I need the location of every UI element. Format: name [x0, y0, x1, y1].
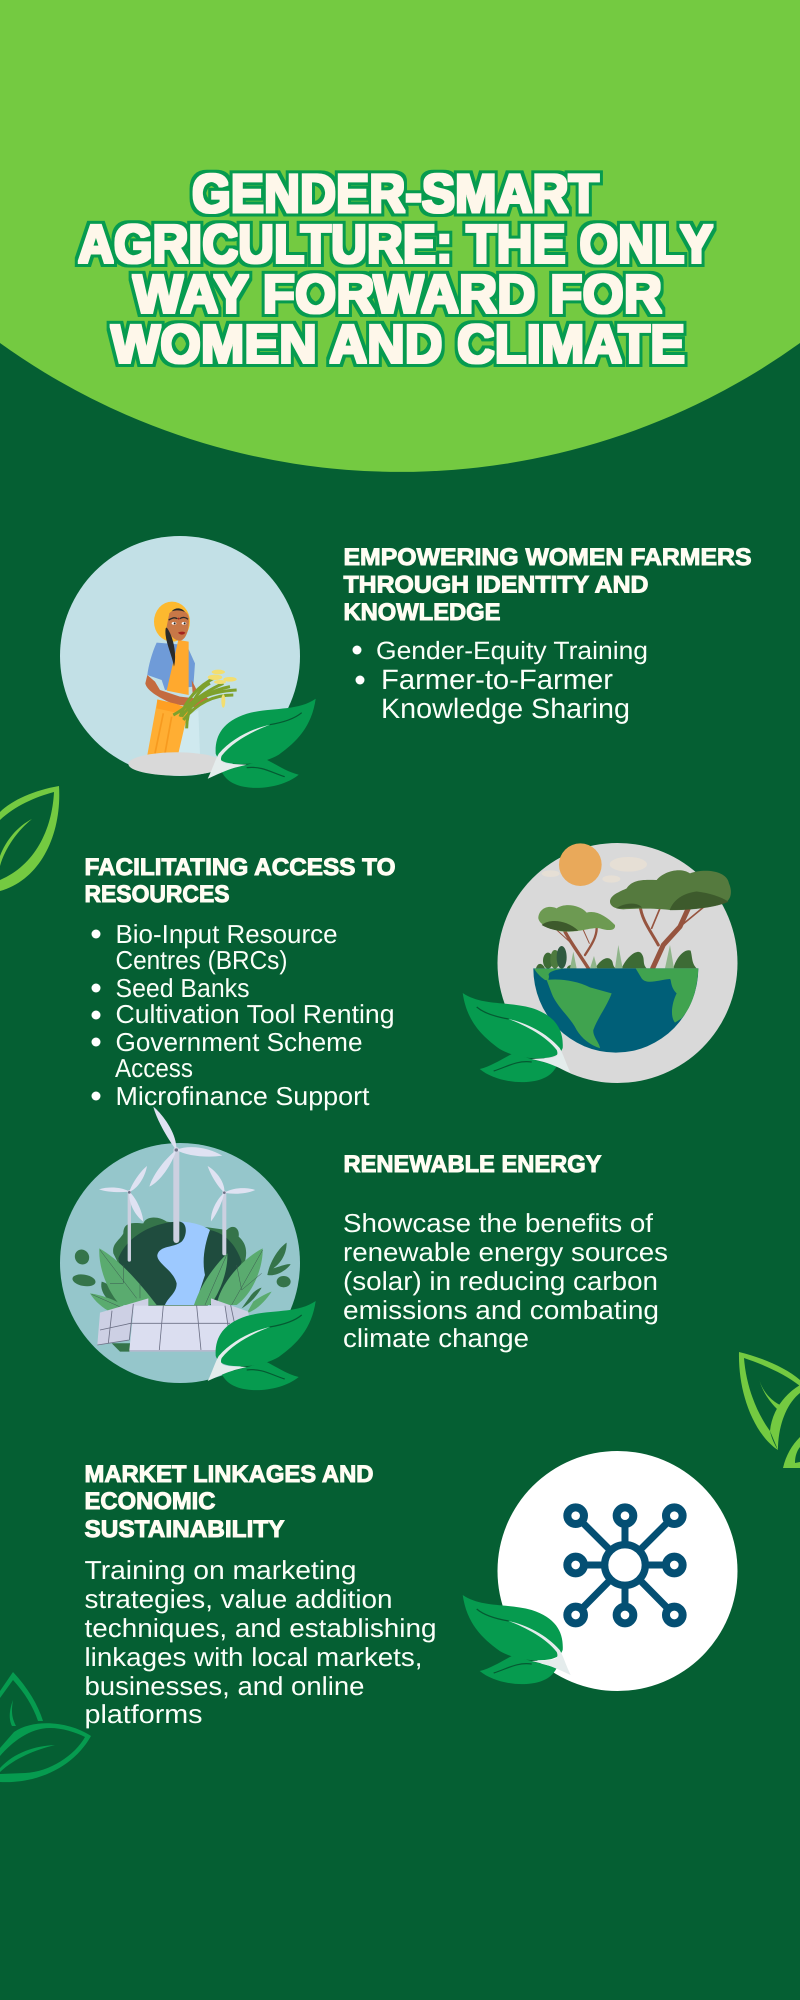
globe, trees and sun [533, 843, 731, 1053]
corner leaf left [0, 786, 59, 891]
heading [344, 544, 752, 626]
title: GENDER-SMART [192, 164, 599, 224]
circle backdrop [60, 1143, 300, 1383]
text block: Training on marketing [84, 1555, 356, 1585]
bullet list: Farmer-to-Farmer [381, 664, 613, 695]
bullet list: Seed Banks [116, 973, 250, 1003]
header curved panel [0, 0, 800, 472]
illustration: woman farmer [60, 536, 316, 788]
icon: leaf pair [208, 699, 316, 788]
text block [343, 1208, 668, 1353]
circle backdrop [60, 536, 300, 776]
heading: RESOURCES [84, 881, 230, 908]
text block: emissions and combating [343, 1295, 659, 1325]
title: WOMEN AND CLIMATE [111, 314, 685, 374]
circle backdrop [498, 843, 738, 1083]
text block [84, 1555, 436, 1729]
text block: climate change [343, 1323, 529, 1353]
circle backdrop [498, 1451, 738, 1691]
heading: MARKET LINKAGES AND [84, 1461, 374, 1488]
bullet list: Microfinance Support [116, 1081, 370, 1111]
bullet list: Knowledge Sharing [381, 693, 630, 724]
title: WAY FORWARD FOR [133, 264, 662, 324]
panel: section 2 facilitating access to resources [84, 843, 738, 1111]
heading: THROUGH IDENTITY AND [344, 572, 648, 598]
heading: SUSTAINABILITY [84, 1516, 284, 1543]
illustration: network icon [463, 1451, 738, 1691]
illustration: half globe with trees [463, 843, 738, 1083]
bullet list: Gender-Equity Training [376, 637, 648, 665]
bullet list: Access [115, 1053, 193, 1083]
bullet list: Cultivation Tool Renting [116, 999, 394, 1029]
bullet list [352, 637, 648, 724]
heading [84, 1461, 374, 1543]
icon: network hub [567, 1507, 683, 1623]
text block: renewable energy sources [343, 1237, 668, 1267]
title [78, 164, 713, 374]
corner leaf bottom left [0, 1672, 91, 1782]
text block: platforms [84, 1699, 202, 1729]
woman with wheat [128, 602, 237, 776]
panel: section 4 market linkages [84, 1451, 738, 1729]
heading: ECONOMIC [84, 1488, 216, 1515]
heading: FACILITATING ACCESS TO [84, 854, 396, 881]
bullet list: Government Scheme [116, 1027, 362, 1057]
text block: linkages with local markets, [84, 1642, 422, 1672]
icon: leaf pair [463, 993, 571, 1082]
earth, turbines, plants and panels [72, 1107, 291, 1352]
text block: techniques, and establishing [84, 1613, 436, 1643]
text block: (solar) in reducing carbon [343, 1266, 658, 1296]
icon: leaf pair [208, 1301, 316, 1390]
text block: strategies, value addition [84, 1584, 392, 1614]
icon: leaf pair [463, 1595, 571, 1684]
text block: businesses, and online [84, 1671, 364, 1701]
title: AGRICULTURE: THE ONLY [78, 214, 713, 274]
panel: section 1 empowering women farmers [60, 536, 752, 788]
heading [84, 854, 396, 908]
panel: section 3 renewable energy [60, 1107, 668, 1390]
illustration: wind turbines and solar panels [60, 1107, 316, 1390]
heading: KNOWLEDGE [344, 599, 500, 626]
corner leaf right [739, 1352, 800, 1468]
bullet list: Centres (BRCs) [116, 945, 288, 975]
heading: RENEWABLE ENERGY [344, 1151, 602, 1178]
text block: Showcase the benefits of [343, 1208, 654, 1238]
heading: EMPOWERING WOMEN FARMERS [344, 544, 752, 571]
bullet list [92, 919, 394, 1111]
bullet list: Bio-Input Resource [116, 919, 338, 949]
